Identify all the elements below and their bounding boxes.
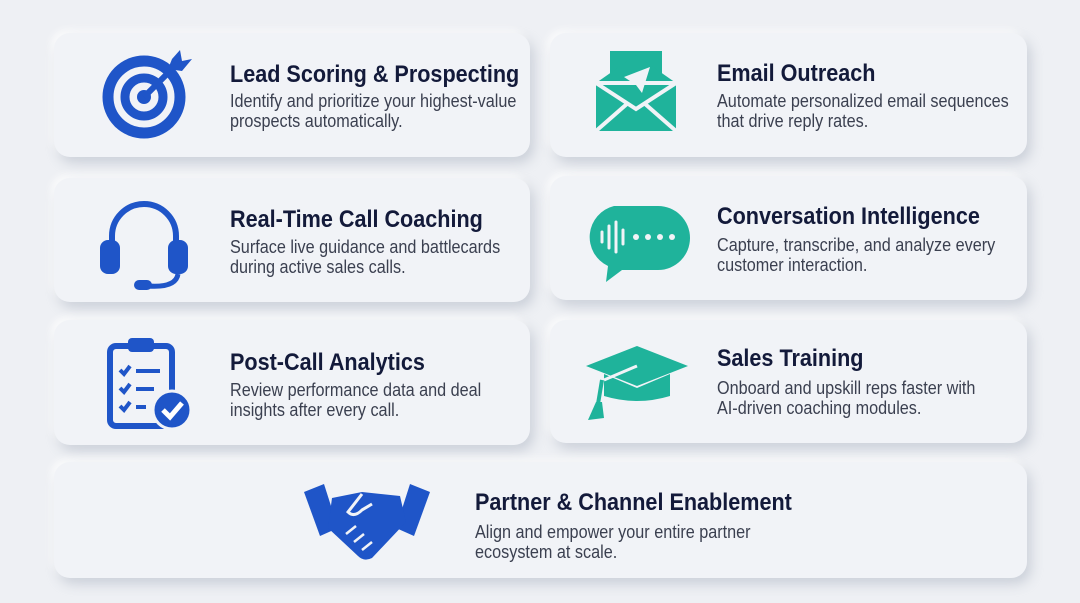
description: Automate personalized email sequences [717,91,1009,111]
icon: clipboard check [107,338,190,429]
description: customer interaction. [717,255,867,275]
description: AI-driven coaching modules. [717,398,921,418]
icon: handshake [304,484,430,560]
panel: lead scoring [54,33,530,157]
panel: partner & channel enablement [54,462,1027,578]
description: that drive reply rates. [717,111,868,131]
panel: sales training [550,320,1027,443]
panel: conversation intelligence [550,176,1027,300]
panel: real-time call coaching [54,178,530,302]
description: Review performance data and deal [230,380,481,400]
description [230,237,500,277]
description: Capture, transcribe, and analyze every [717,235,995,255]
description: Align and empower your entire partner [475,522,751,542]
panel: email outreach [550,33,1027,157]
icon: speech bubble [590,206,690,282]
description: Onboard and upskill reps faster with [717,378,975,398]
title: Lead Scoring & Prospecting [230,61,519,88]
description [230,91,516,131]
description: Surface live guidance and battlecards [230,237,500,257]
title: Partner & Channel Enablement [475,489,792,516]
title: Conversation Intelligence [717,203,980,230]
title: Email Outreach [717,60,875,87]
title: Post-Call Analytics [230,349,425,376]
title: Real-Time Call Coaching [230,206,483,233]
panel: post-call analytics [54,320,530,445]
title: Sales Training [717,345,863,372]
description: Identify and prioritize your highest-value [230,91,516,111]
description [717,91,1009,131]
icon: target [102,50,192,138]
description [717,235,996,275]
icon: envelope [596,51,676,131]
description [230,380,481,420]
icon: headset [100,201,188,290]
description: insights after every call. [230,400,399,420]
description [717,378,975,418]
description: ecosystem at scale. [475,542,617,562]
icon: graduation cap [586,346,688,420]
description: prospects automatically. [230,111,403,131]
description: during active sales calls. [230,257,406,277]
description [475,522,751,562]
